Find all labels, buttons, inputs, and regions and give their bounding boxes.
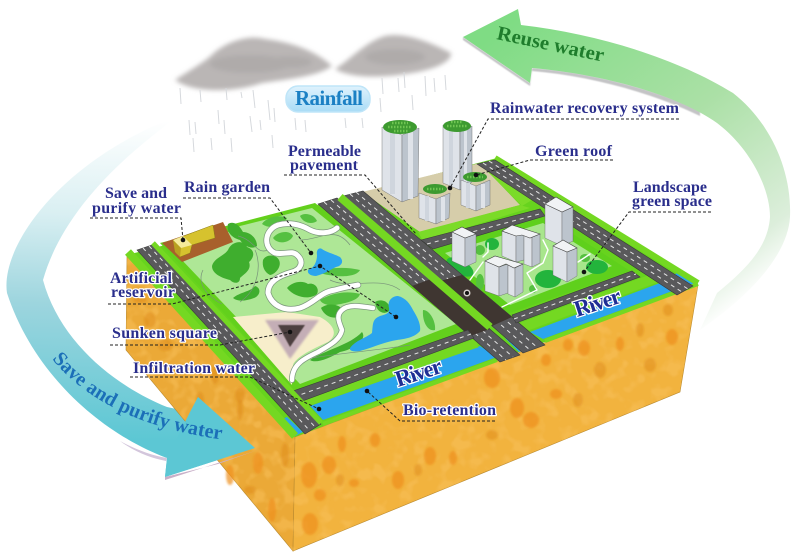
callout: permeable pavement: pavement [290, 157, 359, 174]
paths: white winding walk [267, 224, 358, 309]
callout: landscape green space: Landscape [633, 179, 707, 196]
road: central one [318, 198, 520, 362]
tower A with green roof [382, 120, 419, 202]
building C with green roof [419, 184, 450, 224]
pond: large [350, 296, 420, 351]
callout: sunken square: Sunken square [112, 325, 217, 342]
callout: rainwater recovery system [448, 100, 680, 190]
road: west [137, 244, 321, 434]
callout: sunken square [110, 325, 292, 345]
sponge soil block [120, 250, 710, 555]
callout: green roof: Green roof [535, 143, 613, 160]
callout: save and purify water [90, 185, 185, 242]
green border round plaza [418, 163, 532, 241]
label: save and purify water: Save and purify water [53, 352, 222, 439]
sunken square [265, 320, 319, 359]
callout: artificial reservoir: reservoir [111, 284, 175, 301]
strip between central roads [340, 197, 490, 327]
building: water storage [173, 225, 215, 257]
buildings [382, 120, 577, 297]
pond: small [308, 248, 342, 276]
building G [452, 227, 476, 267]
callout: green roof [474, 143, 613, 177]
label: river two: River [571, 283, 624, 322]
building I [485, 256, 523, 297]
callout: artificial reservoir [108, 264, 398, 319]
callout: permeable pavement: Permeable [288, 143, 361, 160]
arrow: save and purify water body [6, 115, 255, 477]
ground surface [127, 158, 698, 437]
rivers [280, 272, 697, 436]
road: central two [343, 191, 545, 353]
soil: right face [293, 285, 698, 551]
callout: save and purify water: purify water [92, 200, 181, 217]
callout: landscape green space [582, 179, 712, 274]
plaza: permeable paving [362, 163, 520, 232]
arrow: reuse water [463, 9, 790, 330]
callout: rainwater recovery system: Rainwater recovery system [490, 100, 680, 117]
callout: artificial reservoir: Artificial [110, 270, 173, 287]
soil: left face [126, 255, 295, 551]
building D with green roof [461, 172, 490, 211]
building F [553, 240, 577, 282]
label: reuse water: Reuse water [495, 22, 606, 67]
callout: infiltration water [130, 360, 321, 411]
callout: bio-retention [365, 389, 496, 421]
callout: permeable pavement [284, 143, 416, 234]
city block: landscape green space [432, 216, 630, 314]
building E [545, 197, 573, 246]
soil pores [133, 297, 678, 535]
label: river one: River [392, 353, 445, 392]
park block: rain garden area [160, 203, 474, 392]
callout: infiltration water: Infiltration water [133, 360, 255, 377]
road: cross park [290, 330, 474, 403]
tower B with green roof [443, 120, 472, 190]
callout: save and purify water: Save and [105, 185, 167, 202]
paths: thin trail outlines [201, 235, 410, 358]
green verge strips [128, 158, 698, 436]
brown lot [162, 222, 233, 262]
rain [180, 72, 446, 152]
road: east [477, 160, 693, 295]
callout: landscape green space: green space [632, 193, 712, 210]
lawn trees [444, 238, 608, 293]
arrow head overlay and label [53, 352, 255, 480]
permeable road marker [464, 290, 470, 296]
callout: rain garden [183, 179, 313, 255]
trees [212, 214, 435, 361]
building H [502, 225, 540, 267]
rainfall badge: Rainfall [295, 86, 363, 110]
river one [310, 346, 497, 420]
soil texture [120, 250, 710, 555]
road: cross river side [512, 271, 640, 323]
river two [530, 283, 675, 339]
sand plaza [233, 312, 334, 385]
road: cross upper [421, 209, 545, 249]
clouds [175, 35, 451, 90]
road network [137, 160, 693, 434]
callout: bio-retention: Bio-retention [403, 402, 496, 419]
callout: rain garden: Rain garden [184, 179, 270, 196]
